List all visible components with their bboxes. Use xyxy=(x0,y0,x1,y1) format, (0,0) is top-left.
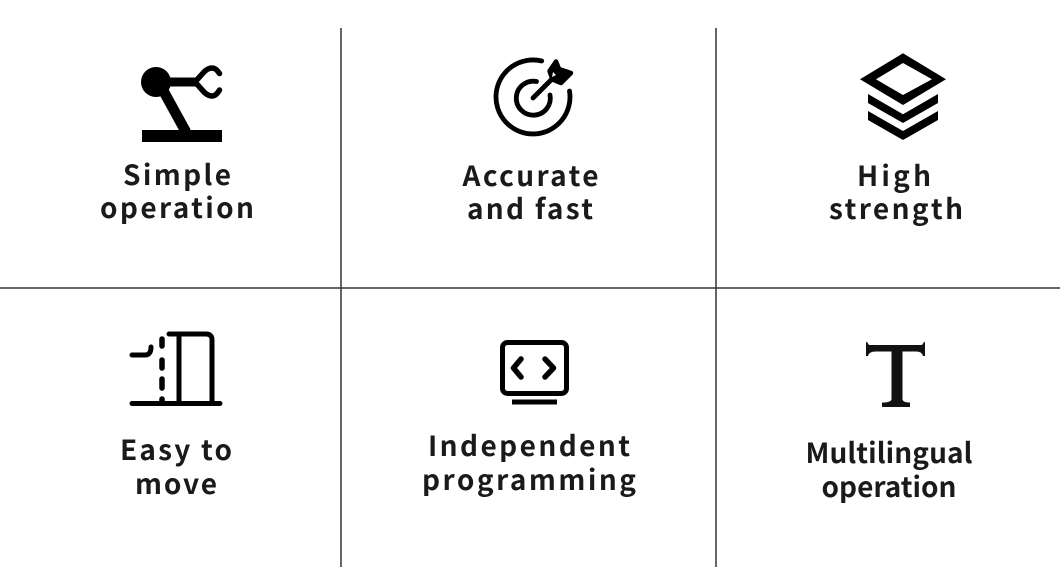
heading: simple operation: operation xyxy=(100,187,254,227)
heading: easy to move: move xyxy=(135,463,217,503)
icon: door moving xyxy=(132,334,220,404)
icon: code monitor xyxy=(502,342,566,402)
panel: independent programming xyxy=(422,342,636,499)
icon: robot arm xyxy=(141,67,222,142)
panel: accurate and fast xyxy=(462,60,598,228)
heading: independent programming xyxy=(422,425,636,499)
heading: multilingual operation: operation xyxy=(822,466,956,506)
panel: easy to move xyxy=(120,334,232,503)
heading: high strength: High xyxy=(857,155,931,195)
heading: multilingual operation xyxy=(806,432,973,506)
heading: high strength xyxy=(829,155,963,228)
panel: simple operation xyxy=(100,67,254,227)
icon: target with arrow xyxy=(496,60,571,134)
heading: simple operation: Simple xyxy=(123,154,231,194)
heading: accurate and fast xyxy=(462,155,598,228)
heading: easy to move xyxy=(120,429,232,503)
heading: accurate and fast: Accurate xyxy=(462,155,598,195)
heading: simple operation xyxy=(100,154,254,227)
icon: stacked layers xyxy=(860,53,946,140)
heading: independent programming: programming xyxy=(422,459,636,499)
heading: multilingual operation: Multilingual xyxy=(806,432,973,472)
icon: letter T xyxy=(866,342,925,407)
panel: multilingual operation xyxy=(806,342,973,506)
panel: high strength xyxy=(829,53,963,228)
heading: high strength: strength xyxy=(829,188,963,228)
heading: independent programming: Independent xyxy=(428,425,630,465)
heading: accurate and fast: and fast xyxy=(467,188,593,228)
heading: easy to move: Easy to xyxy=(120,429,232,469)
